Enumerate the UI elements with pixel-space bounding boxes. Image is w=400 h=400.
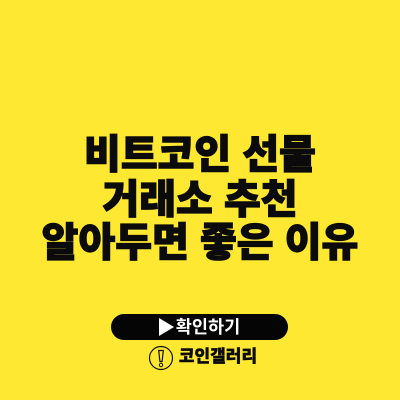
- icon: exclamation circle: [148, 346, 174, 370]
- title: [42, 133, 358, 265]
- button: confirm: [111, 314, 288, 340]
- brand name: 코인갤러리: [179, 347, 257, 366]
- title: 비트코인 선물: [84, 133, 316, 177]
- button: confirm: 확인하기: [176, 317, 240, 337]
- title: 알아두면 좋은 이유: [42, 221, 358, 265]
- title: 거래소 추천: [102, 178, 298, 222]
